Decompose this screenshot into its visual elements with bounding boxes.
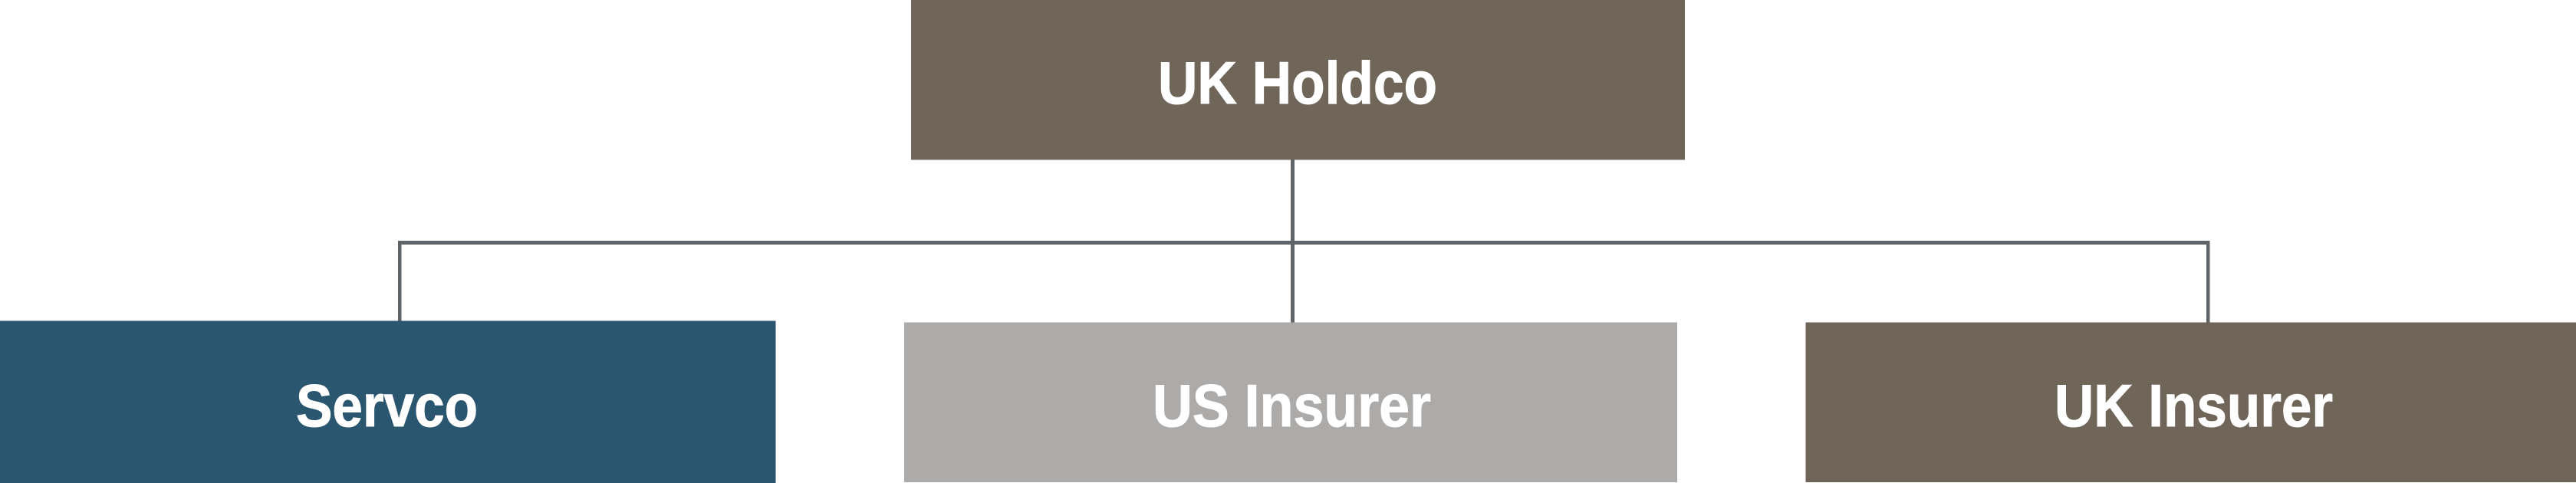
label: Servco: Servco bbox=[296, 372, 478, 439]
box: UK Insurer bbox=[1805, 322, 2576, 482]
label: US Insurer: US Insurer bbox=[1153, 372, 1431, 439]
label: UK Insurer: UK Insurer bbox=[2055, 372, 2333, 439]
label: UK Holdco: UK Holdco bbox=[1158, 49, 1437, 117]
connector lines bbox=[398, 159, 2210, 323]
box: US Insurer bbox=[904, 322, 1677, 482]
box: UK Holdco bbox=[911, 0, 1685, 159]
box: Servco bbox=[0, 320, 776, 483]
